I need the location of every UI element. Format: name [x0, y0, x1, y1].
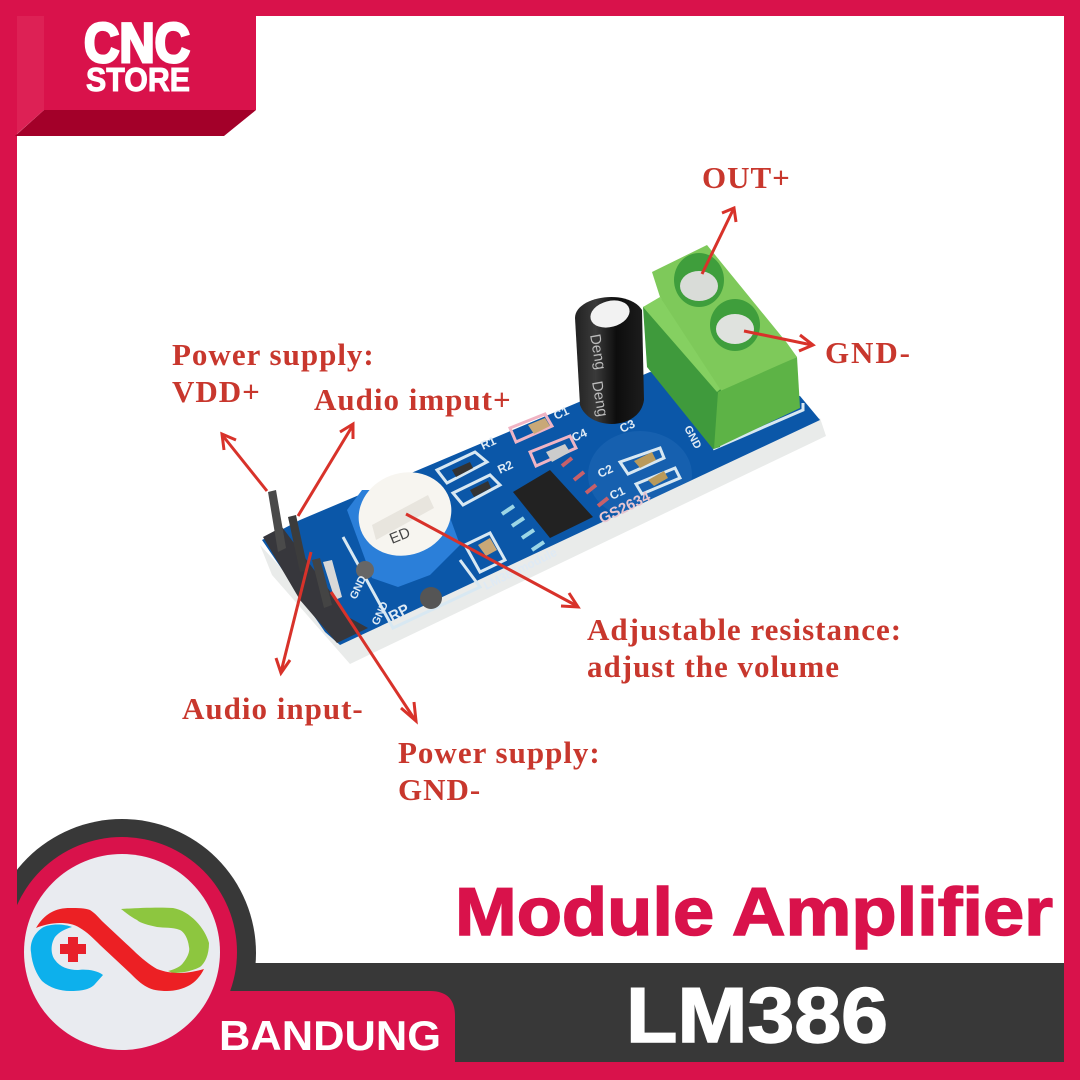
electrolytic capacitor: [575, 296, 644, 424]
arrow: GND-: [744, 331, 813, 351]
title: LM386: LM386: [626, 971, 888, 1059]
arrow: power supply VDD+: [222, 434, 267, 491]
label: OUT+: OUT+: [702, 160, 791, 195]
arrows: [222, 208, 813, 721]
board edge: [260, 418, 826, 664]
silk labels: C4: [569, 425, 589, 445]
silk labels: RP: [386, 601, 412, 626]
silk labels: GND: [370, 600, 391, 627]
branch label: BANDUNG: [219, 1012, 441, 1059]
label: GND-: GND-: [825, 335, 911, 370]
label: adjustable resistance: Adjustable resistance:: [587, 612, 902, 647]
circular logo: [24, 854, 220, 1050]
trimmer potentiometer: [347, 459, 463, 609]
logo: blue swoosh: [31, 924, 103, 991]
crimson badge: [17, 837, 455, 1062]
SMD components: [452, 418, 668, 556]
board surface: [262, 372, 820, 645]
arrow: audio input+: [298, 424, 353, 516]
label: adjustable resistance: adjust the volume: [587, 649, 840, 684]
arrow: power supply GND-: [331, 592, 416, 721]
silkscreen outlines: [343, 403, 803, 628]
IC chip: [502, 458, 608, 550]
silk labels: C1: [551, 403, 571, 423]
silk labels: C2: [595, 461, 615, 481]
logo: red cross: [60, 937, 86, 962]
silk labels: R1: [478, 433, 498, 453]
silk labels: C3: [617, 416, 637, 436]
logo: CNC Store: [14, 11, 256, 136]
pin header: [263, 490, 368, 643]
title: module amplifier: Module Amplifier: [455, 874, 1053, 950]
label: power supply VDD+: Power supply:: [172, 337, 375, 372]
silk labels: R2: [495, 457, 515, 477]
logo: CNC Store: STORE: [86, 61, 190, 98]
silk labels: GND: [681, 424, 703, 451]
logo: red swoosh: [36, 908, 204, 991]
arrow: audio input-: [276, 552, 311, 673]
electrolytic capacitor: Deng: [586, 333, 609, 371]
label: power supply GND-: Power supply:: [398, 735, 601, 770]
label: power supply VDD+: VDD+: [172, 374, 261, 409]
silk labels: C1: [607, 483, 627, 503]
logo: CNC Store: CNC: [84, 11, 190, 74]
label: audio input-: Audio input-: [182, 691, 364, 726]
trimmer potentiometer: ED: [387, 524, 413, 548]
module board photo: [260, 245, 826, 664]
silk labels: LM386module: [481, 545, 560, 593]
label: power supply GND-: GND-: [398, 772, 481, 807]
arrow: adjustable resistance: [406, 514, 578, 607]
silk labels: GND: [348, 574, 369, 601]
silk labels: GS2634: [596, 488, 654, 528]
dark footer band: [0, 819, 1064, 1080]
silk labels: [348, 403, 703, 627]
green screw terminal: [643, 245, 800, 449]
label: audio imput+: Audio imput+: [314, 382, 512, 417]
electrolytic capacitor: Deng: [588, 380, 611, 418]
arrow: OUT+: [702, 208, 736, 274]
logo: green swoosh: [121, 908, 209, 973]
